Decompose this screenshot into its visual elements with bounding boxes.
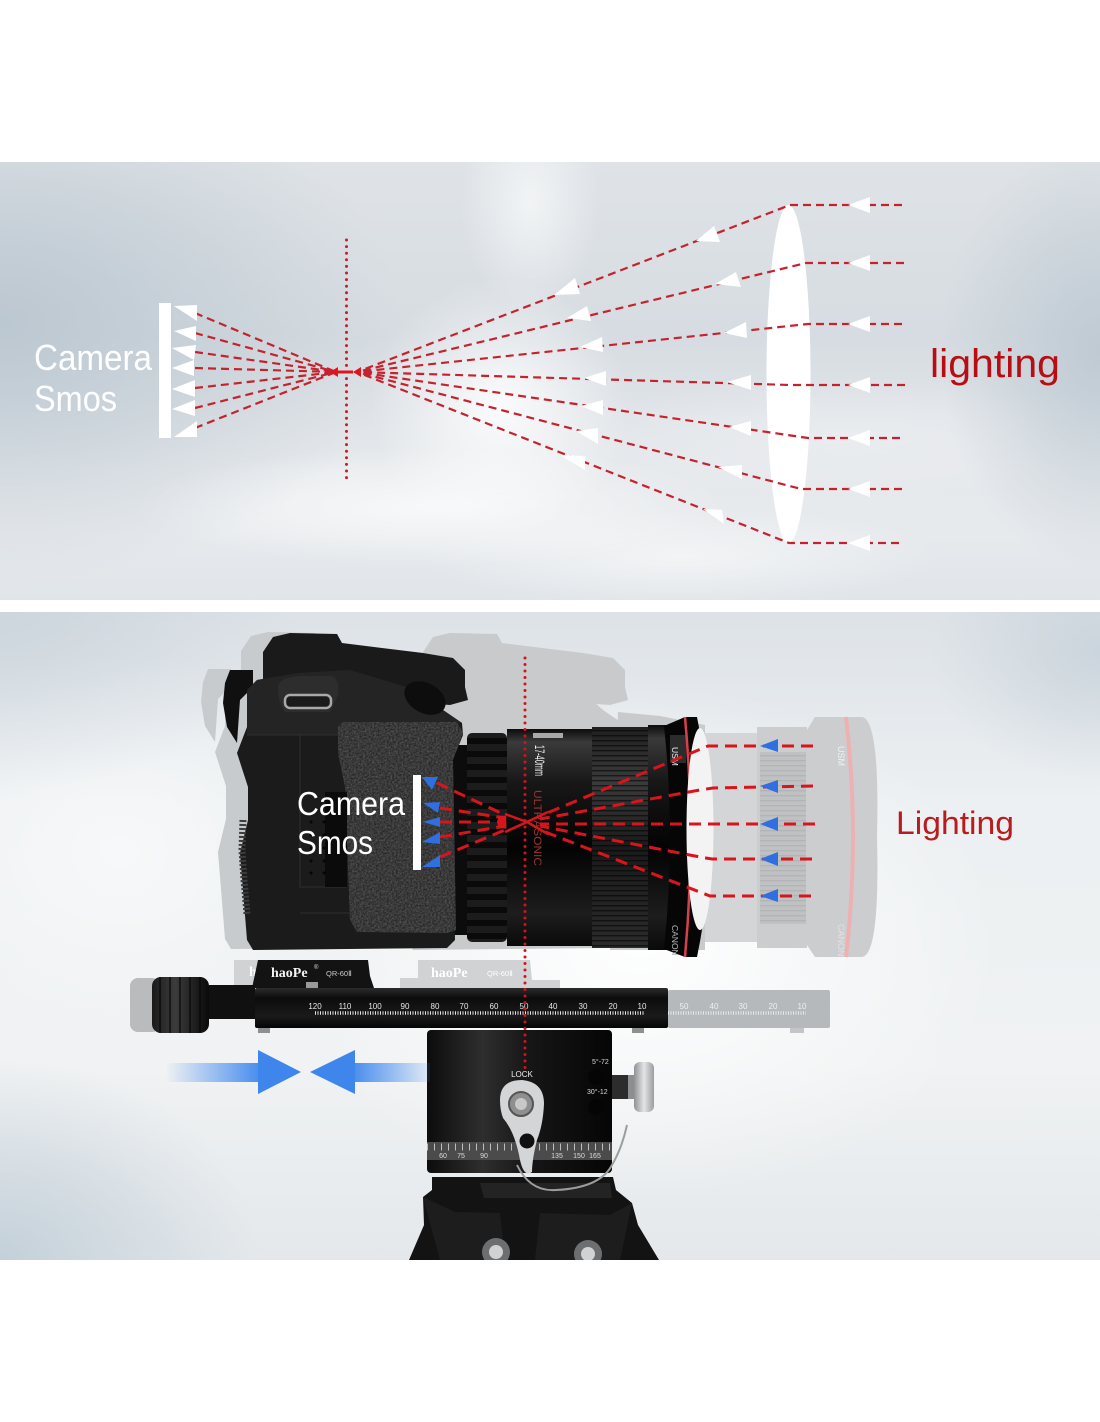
ghost quick release plates: ha — [249, 965, 264, 980]
macro rail: 30 — [579, 1002, 588, 1011]
white arrows on inner rays — [554, 278, 606, 470]
blue arrow: pointing left — [310, 1050, 430, 1094]
lens assembly — [447, 717, 710, 957]
panel: camera on macro rail — [0, 612, 1100, 1260]
camera body — [237, 670, 467, 950]
ghost rail: 10 — [798, 1002, 807, 1011]
lock label: LOCK — [511, 1070, 534, 1079]
lens front rim — [664, 717, 710, 957]
lens — [766, 205, 810, 543]
rail scale — [315, 1011, 645, 1015]
macro rail: 70 — [460, 1002, 469, 1011]
speaker bump — [399, 674, 451, 722]
lens markings: ULTRASONIC — [531, 790, 543, 866]
side dial — [242, 820, 247, 914]
macro rail — [255, 988, 668, 1033]
focal point marks — [330, 367, 361, 377]
macro rail: 20 — [609, 1002, 618, 1011]
macro rail: 110 — [339, 1002, 352, 1011]
camera eyecup and top housing — [223, 633, 468, 743]
white arrows on outer rays — [696, 226, 751, 524]
panoramic head cylinder: 75 — [457, 1153, 465, 1160]
optical axis dotted line — [345, 240, 348, 480]
focal point marks — [499, 812, 548, 834]
white arrows at sensor — [172, 305, 197, 437]
ghost rail: 20 — [769, 1002, 778, 1011]
macro rail: 40 — [549, 1002, 558, 1011]
red light rays — [195, 205, 905, 543]
mounting holes and labels — [587, 1058, 609, 1115]
label: camera sensor: Camera — [34, 337, 153, 378]
ghost rail: 30 — [739, 1002, 748, 1011]
ghost lens: CANON — [836, 924, 846, 957]
lens markings: USM — [670, 747, 680, 766]
label: camera sensor — [34, 337, 153, 419]
ghost quick release plates — [234, 960, 560, 988]
ghost knob — [130, 978, 160, 1032]
macro rail: 100 — [368, 1002, 382, 1011]
safety cable — [517, 1125, 627, 1190]
lens markings: CANON — [670, 925, 680, 956]
lens markings: 17-40mm — [532, 745, 548, 776]
macro rail: 120 — [308, 1002, 322, 1011]
label: camera sensor: Camera — [297, 785, 406, 822]
ghost quick release plates: QR-60Ⅱ — [487, 969, 513, 978]
red ring — [685, 717, 690, 957]
body top panel — [247, 670, 462, 735]
panoramic head cylinder: 135 — [551, 1153, 563, 1160]
knob and clamp — [152, 977, 255, 1033]
panoramic head cylinder: 90 — [480, 1153, 488, 1160]
door seams and port slot — [247, 735, 351, 913]
ghost lens — [705, 717, 877, 957]
side locking knob — [612, 1062, 654, 1112]
optical axis dotted line — [524, 658, 526, 1072]
blue arrows at sensor — [422, 777, 440, 867]
quick release plate: haoPe — [271, 966, 308, 981]
macro rail: 90 — [401, 1002, 410, 1011]
textured grip — [335, 720, 467, 936]
lock lever — [500, 1080, 544, 1174]
white arrows right of lens — [848, 197, 870, 551]
tripod base — [409, 1177, 659, 1268]
label: lighting: Lighting — [896, 805, 1014, 841]
lens markings — [531, 745, 680, 956]
panel: light path diagram — [0, 162, 1100, 600]
ghost rail — [668, 990, 830, 1033]
panoramic head cylinder: 150 — [573, 1153, 585, 1160]
label: camera sensor: Smos — [297, 824, 373, 861]
ghost rail: 50 — [680, 1002, 689, 1011]
label: lighting: lighting — [930, 342, 1060, 386]
red light rays — [437, 746, 815, 896]
mounting holes and labels: 30°-12 — [587, 1088, 608, 1096]
macro rail: 60 — [490, 1002, 499, 1011]
mounting holes and labels: 5°-72 — [592, 1058, 609, 1066]
label: camera sensor: Smos — [34, 378, 117, 419]
degree scale band — [427, 1142, 612, 1160]
macro rail: 10 — [638, 1002, 647, 1011]
door ghost dots — [310, 820, 326, 874]
blue arrows on incoming rays — [760, 739, 778, 902]
macro rail: 50 — [520, 1002, 529, 1011]
sensor bar — [159, 303, 171, 438]
blue arrow: pointing right — [166, 1050, 301, 1094]
quick release plate: ® — [314, 964, 319, 971]
macro rail: 80 — [431, 1002, 440, 1011]
label: camera sensor — [297, 785, 406, 861]
ghost camera: rear position — [201, 632, 446, 949]
ghost quick release plates: haoPe — [431, 966, 468, 981]
sensor bar — [413, 775, 421, 870]
ghost camera: forward position — [383, 633, 705, 950]
top dial with strap lug — [278, 676, 338, 712]
panoramic head cylinder — [427, 1030, 612, 1173]
white lens element — [686, 728, 714, 930]
ghost rail: 40 — [710, 1002, 719, 1011]
panoramic head cylinder: 165 — [589, 1153, 601, 1160]
quick release plate — [252, 960, 374, 988]
quick release plate: QR-60Ⅱ — [326, 969, 352, 978]
panoramic head cylinder: 60 — [439, 1153, 447, 1160]
ghost lens: USM — [836, 746, 846, 766]
